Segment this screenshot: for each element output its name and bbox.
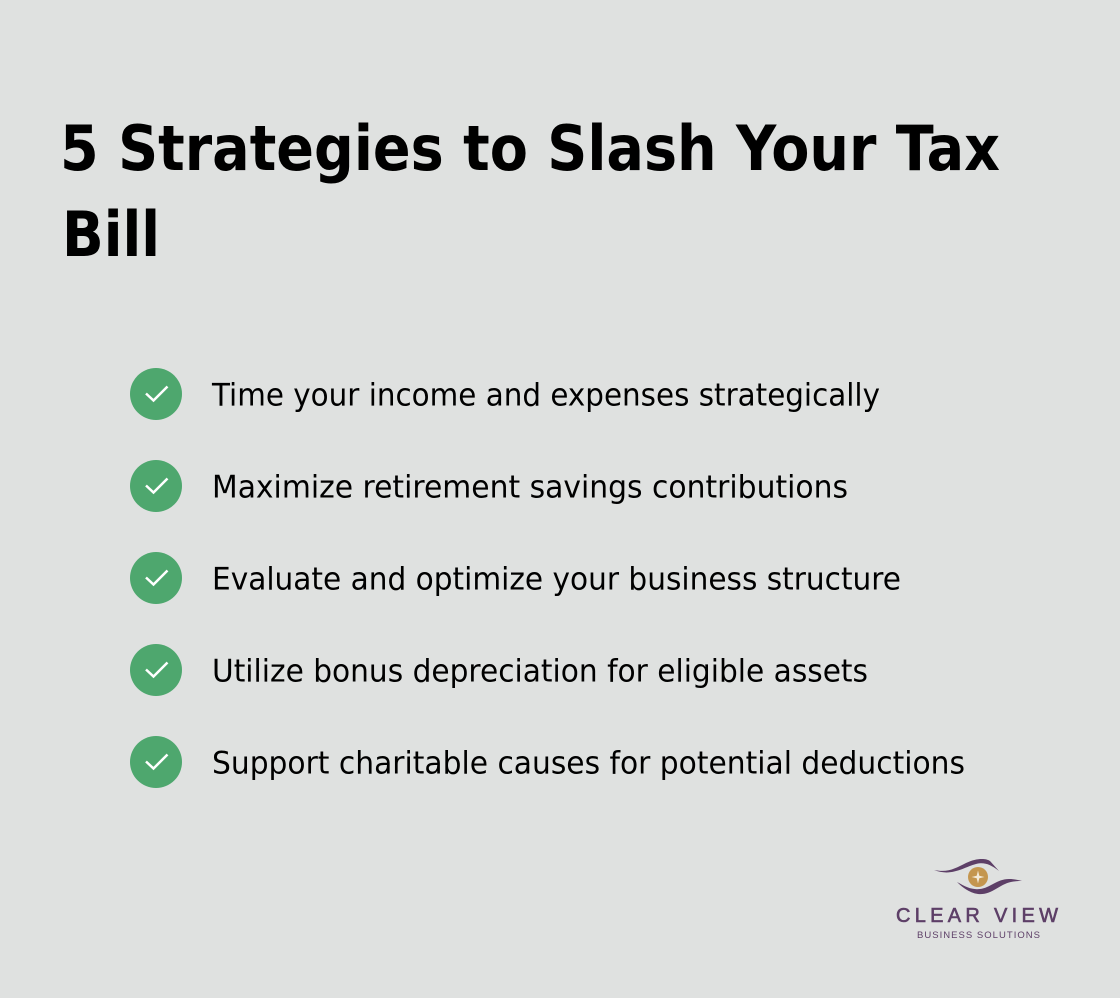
icon: eye <box>934 859 1022 894</box>
title <box>60 112 1000 271</box>
item 1: Time your income and expenses strategically <box>211 378 880 414</box>
item 4: Utilize bonus depreciation for eligible assets <box>212 654 868 690</box>
item 2: Maximize retirement savings contributions <box>212 470 848 506</box>
item 3 <box>130 552 901 604</box>
item 4 <box>130 644 868 696</box>
logo wordmark: CLEAR VIEW <box>896 905 1058 927</box>
item 5 <box>130 736 965 788</box>
logo tagline: BUSINESS SOLUTIONS <box>917 930 1040 941</box>
item 5: Support charitable causes for potential deductions <box>212 746 965 782</box>
item 1 <box>130 368 880 420</box>
logo: Clear View Business Solutions <box>896 859 1058 941</box>
title: 5 Strategies to Slash Your Tax <box>60 112 1000 185</box>
item 3: Evaluate and optimize your business structure <box>212 562 901 598</box>
title: Bill <box>62 198 160 271</box>
item 2 <box>130 460 848 512</box>
checklist <box>130 368 965 788</box>
